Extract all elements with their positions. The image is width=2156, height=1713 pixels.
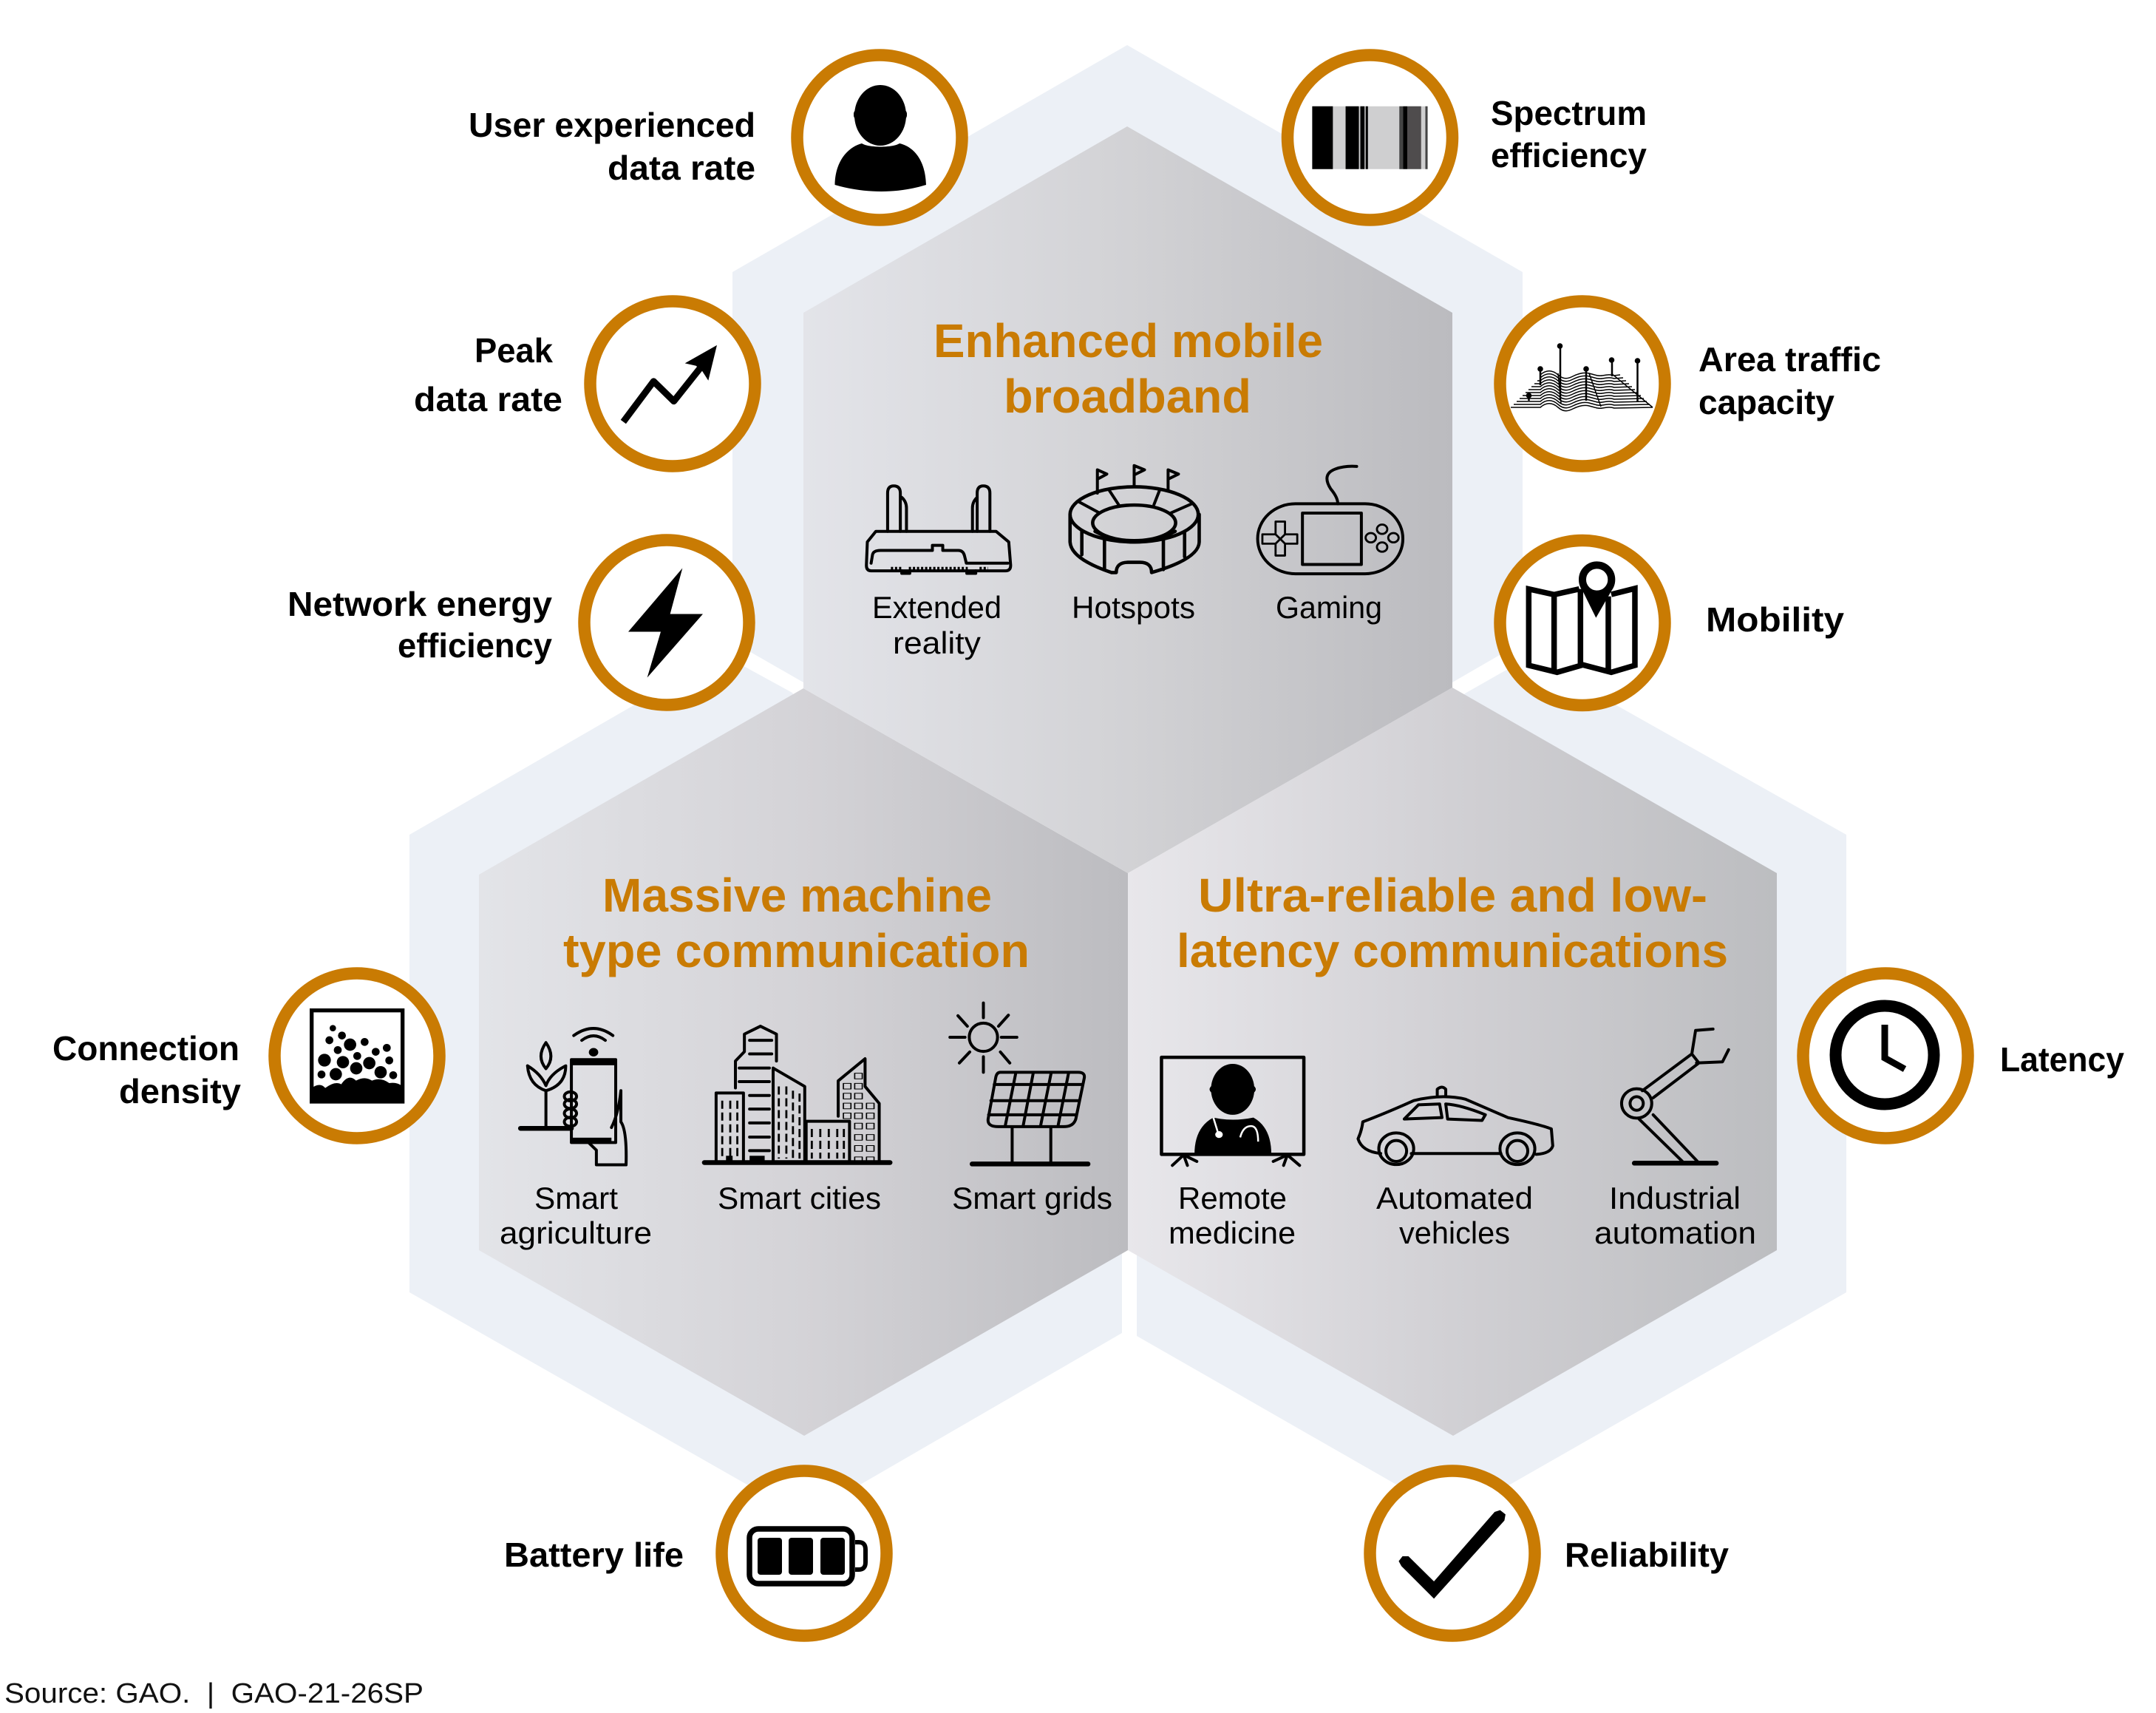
heading: mMTC: type communication [563, 924, 1030, 977]
metric: mobility [1500, 540, 1844, 705]
label: Spectrum [1491, 94, 1647, 132]
label: data rate [414, 380, 562, 418]
ring [1803, 973, 1968, 1139]
icon: traffic surface [1511, 343, 1653, 411]
panel: ultra-reliable and low-latency communications [1128, 688, 1777, 1436]
label: smart agriculture [500, 1181, 652, 1250]
icon: stadium hotspot [1070, 466, 1199, 572]
heading: URLLC: Ultra-reliable and low- [1198, 869, 1707, 922]
icon: battery [749, 1529, 866, 1584]
metric: user experienced data rate [469, 55, 962, 220]
icon: map with pin [1528, 565, 1635, 672]
label: data rate [608, 149, 755, 187]
icon: automated vehicle [1358, 1088, 1553, 1164]
metric: spectrum efficiency [1288, 55, 1647, 220]
ring [1288, 55, 1452, 220]
icon: lightning bolt [628, 568, 703, 678]
source note: Source: GAO. | GAO-21-26SP [4, 1678, 424, 1709]
label [1698, 340, 1881, 421]
label: smart cities: Smart cities [718, 1181, 881, 1215]
icon: particles in a box [312, 1011, 403, 1102]
hexagon background [1128, 688, 1777, 1436]
ring [1500, 540, 1664, 705]
label: remote medicine [1169, 1181, 1296, 1250]
hexagon background [479, 688, 1128, 1436]
metric: latency [1803, 973, 2124, 1139]
ring [1370, 1471, 1534, 1635]
ring [721, 1471, 887, 1635]
label [52, 1029, 241, 1110]
label: automated vehicles [1376, 1181, 1533, 1250]
icon: rising arrow [623, 345, 717, 422]
label: gaming: Gaming [1276, 590, 1382, 625]
icon: remote medicine [1161, 1057, 1304, 1165]
icon: game controller [1258, 467, 1403, 574]
label: Connection [52, 1029, 239, 1068]
label: capacity [1698, 383, 1834, 421]
metric: reliability [1370, 1471, 1729, 1635]
outer hexagon: lower left [409, 654, 1122, 1517]
icon: spectrum bars [1312, 106, 1428, 169]
label [288, 585, 552, 665]
label: efficiency [398, 626, 552, 665]
label: extended reality: Extended [872, 590, 1002, 625]
ring [584, 540, 749, 705]
icon: check mark [1398, 1510, 1506, 1598]
icon: smart agriculture [520, 1028, 626, 1165]
icon: smart grids (sun and solar panel) [950, 1003, 1088, 1164]
label: automated vehicles: vehicles [1399, 1215, 1510, 1250]
label [1491, 94, 1647, 174]
label: density [119, 1072, 241, 1110]
label: Area traffic [1698, 340, 1881, 379]
panel: massive machine type communication [479, 688, 1128, 1436]
icon: router [866, 486, 1010, 574]
label: hotspots: Hotspots [1072, 590, 1195, 625]
ring [1500, 302, 1664, 466]
outer hexagon: top [732, 45, 1523, 682]
label [469, 106, 755, 187]
label [414, 331, 562, 418]
heading: URLLC: latency communications [1177, 924, 1728, 977]
icon: smart cities [704, 1026, 890, 1163]
label: industrial automation: Industrial [1609, 1181, 1741, 1215]
icon: industrial robot arm [1622, 1029, 1729, 1163]
label: smart grids: Smart grids [952, 1181, 1112, 1215]
heading: eMBB [934, 314, 1323, 423]
label: industrial automation [1594, 1181, 1756, 1250]
label: Peak [475, 331, 553, 370]
metric: connection density [52, 973, 439, 1139]
label: smart agriculture: Smart [534, 1181, 618, 1215]
label: extended reality: reality [893, 625, 981, 660]
ring [275, 973, 439, 1139]
label: efficiency [1491, 136, 1647, 174]
label: remote medicine: Remote [1178, 1181, 1287, 1215]
label: User experienced [469, 106, 755, 144]
label: Battery life [504, 1536, 684, 1574]
label: Reliability [1565, 1536, 1729, 1574]
ring [590, 302, 755, 466]
label: Latency [2000, 1040, 2124, 1079]
label: Network energy [288, 585, 552, 623]
heading: eMBB: broadband [1004, 370, 1251, 423]
heading: eMBB: Enhanced mobile [934, 314, 1323, 367]
metric: network energy efficiency [288, 540, 749, 705]
panel: enhanced mobile broadband [803, 126, 1452, 873]
metric: peak data rate [414, 302, 755, 466]
label: automated vehicles: Automated [1376, 1181, 1533, 1215]
heading: URLLC [1177, 869, 1728, 977]
label: extended reality [872, 590, 1002, 660]
heading: mMTC: Massive machine [602, 869, 992, 922]
heading: mMTC [563, 869, 1030, 977]
label: Mobility [1706, 600, 1844, 639]
ring [797, 55, 962, 220]
label: remote medicine: medicine [1169, 1215, 1296, 1250]
hexagon background [803, 126, 1452, 873]
label: smart agriculture: agriculture [500, 1215, 652, 1250]
icon: clock [1836, 1005, 1934, 1105]
outer hexagon: lower right [1137, 657, 1846, 1517]
metric: area traffic capacity [1500, 302, 1881, 466]
metric: battery life [504, 1471, 887, 1635]
icon: person [835, 85, 926, 191]
label: industrial automation: automation [1594, 1215, 1756, 1250]
